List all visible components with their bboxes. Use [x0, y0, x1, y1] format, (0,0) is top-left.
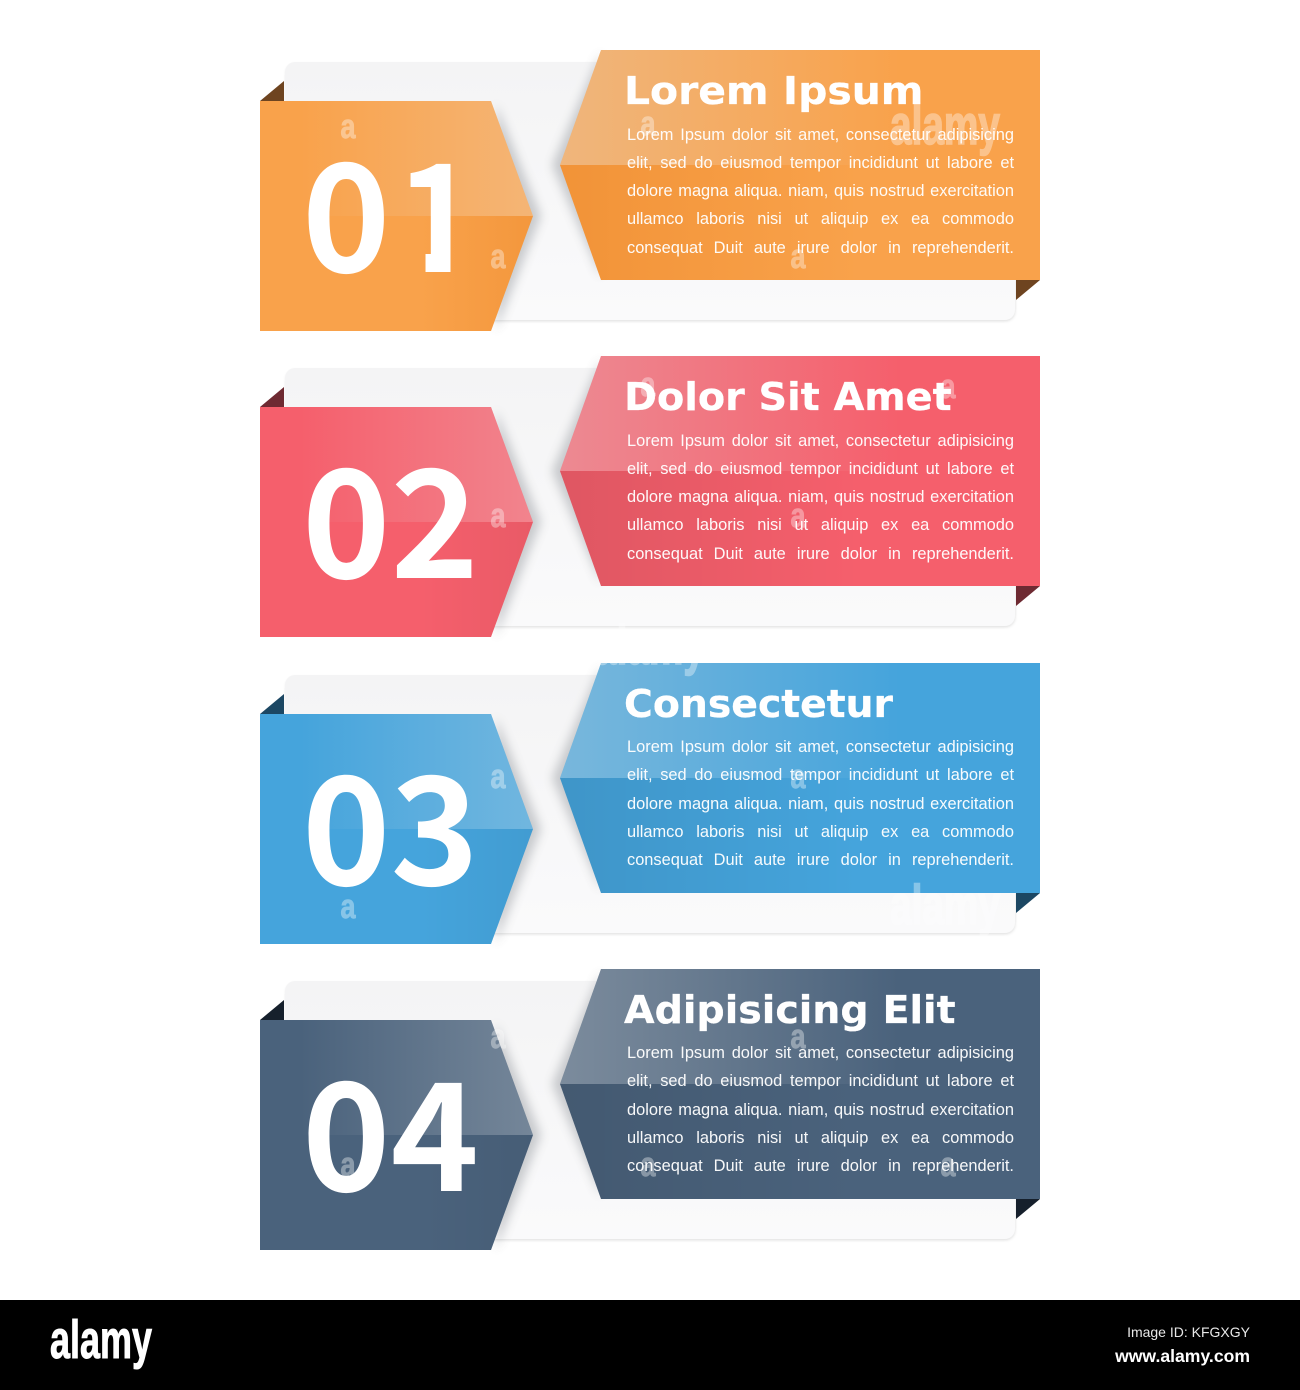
- watermarks: alamy: [890, 93, 1000, 156]
- number 02: 02: [302, 405, 479, 622]
- heading: Lorem Ipsum: Lorem Ipsum: [624, 69, 923, 113]
- number 04: 04: [302, 1018, 479, 1235]
- footer bar: [0, 1300, 1300, 1390]
- watermarks: a: [640, 1146, 656, 1184]
- watermarks: a: [340, 1146, 356, 1184]
- heading: Consectetur: Consectetur: [624, 682, 893, 726]
- watermarks: a: [940, 1146, 956, 1184]
- text block: Lorem Ipsum dolor sit amet, consectetur adipisicing: [627, 738, 1014, 756]
- number 01: 1: [395, 99, 483, 316]
- text block: Lorem Ipsum dolor sit amet, consectetur adipisicing: [627, 1044, 1014, 1062]
- text block: consequat Duit aute irure dolor in reprehenderit.: [627, 851, 1014, 869]
- text block: ullamco laboris nisi ut aliquip ex ea commodo: [627, 823, 1014, 841]
- text block: consequat Duit aute irure dolor in reprehenderit.: [627, 545, 1014, 563]
- panel: step 04: [260, 969, 1040, 1250]
- text block: elit, sed do eiusmod tempor incididunt ut labore et: [627, 766, 1014, 784]
- text block: [627, 432, 1014, 563]
- watermarks: a: [490, 238, 506, 276]
- watermarks: a: [340, 888, 356, 926]
- watermarks: alamy: [890, 873, 1000, 936]
- text block: dolore magna aliqua. niam, quis nostrud exercitation: [627, 488, 1014, 506]
- text block: elit, sed do eiusmod tempor incididunt ut labore et: [627, 460, 1014, 478]
- text block: ullamco laboris nisi ut aliquip ex ea commodo: [627, 210, 1014, 228]
- text block: elit, sed do eiusmod tempor incididunt ut labore et: [627, 154, 1014, 172]
- number 01: [302, 99, 450, 316]
- watermarks: a: [790, 497, 806, 535]
- heading: Adipisicing Elit: Adipisicing Elit: [624, 988, 955, 1032]
- panel: step 02: [260, 356, 1040, 637]
- watermarks: a: [490, 497, 506, 535]
- text block: dolore magna aliqua. niam, quis nostrud exercitation: [627, 182, 1014, 200]
- footer logo: alamy: [50, 1310, 152, 1370]
- watermarks: a: [940, 368, 956, 406]
- watermarks: a: [490, 758, 506, 796]
- watermarks: a: [340, 108, 356, 146]
- text block: elit, sed do eiusmod tempor incididunt ut labore et: [627, 1072, 1014, 1090]
- text block: [627, 126, 1014, 257]
- text block: Lorem Ipsum dolor sit amet, consectetur adipisicing: [627, 432, 1014, 450]
- watermarks: a: [640, 105, 656, 143]
- text block: ullamco laboris nisi ut aliquip ex ea commodo: [627, 516, 1014, 534]
- text block: [627, 1044, 1014, 1175]
- number 01: 0: [302, 99, 391, 316]
- watermarks: a: [790, 238, 806, 276]
- text block: Lorem Ipsum dolor sit amet, consectetur adipisicing: [627, 126, 1014, 144]
- watermarks: a: [790, 758, 806, 796]
- watermarks: a: [640, 366, 656, 404]
- image id: Image ID: KFGXGY: [1127, 1324, 1250, 1340]
- heading: Dolor Sit Amet: Dolor Sit Amet: [624, 375, 952, 419]
- panel: step 03: [260, 663, 1040, 944]
- watermarks: a: [790, 1018, 806, 1056]
- watermarks: alamy: [595, 613, 705, 676]
- text block: consequat Duit aute irure dolor in reprehenderit.: [627, 1157, 1014, 1175]
- text block: consequat Duit aute irure dolor in reprehenderit.: [627, 239, 1014, 257]
- website: www.alamy.com: [1115, 1346, 1250, 1366]
- text block: [627, 738, 1014, 869]
- text block: dolore magna aliqua. niam, quis nostrud exercitation: [627, 795, 1014, 813]
- text block: ullamco laboris nisi ut aliquip ex ea commodo: [627, 1129, 1014, 1147]
- number 03: 03: [302, 712, 479, 928]
- text block: dolore magna aliqua. niam, quis nostrud exercitation: [627, 1101, 1014, 1119]
- panel: step 01: [260, 50, 1040, 331]
- watermarks: a: [490, 1018, 506, 1056]
